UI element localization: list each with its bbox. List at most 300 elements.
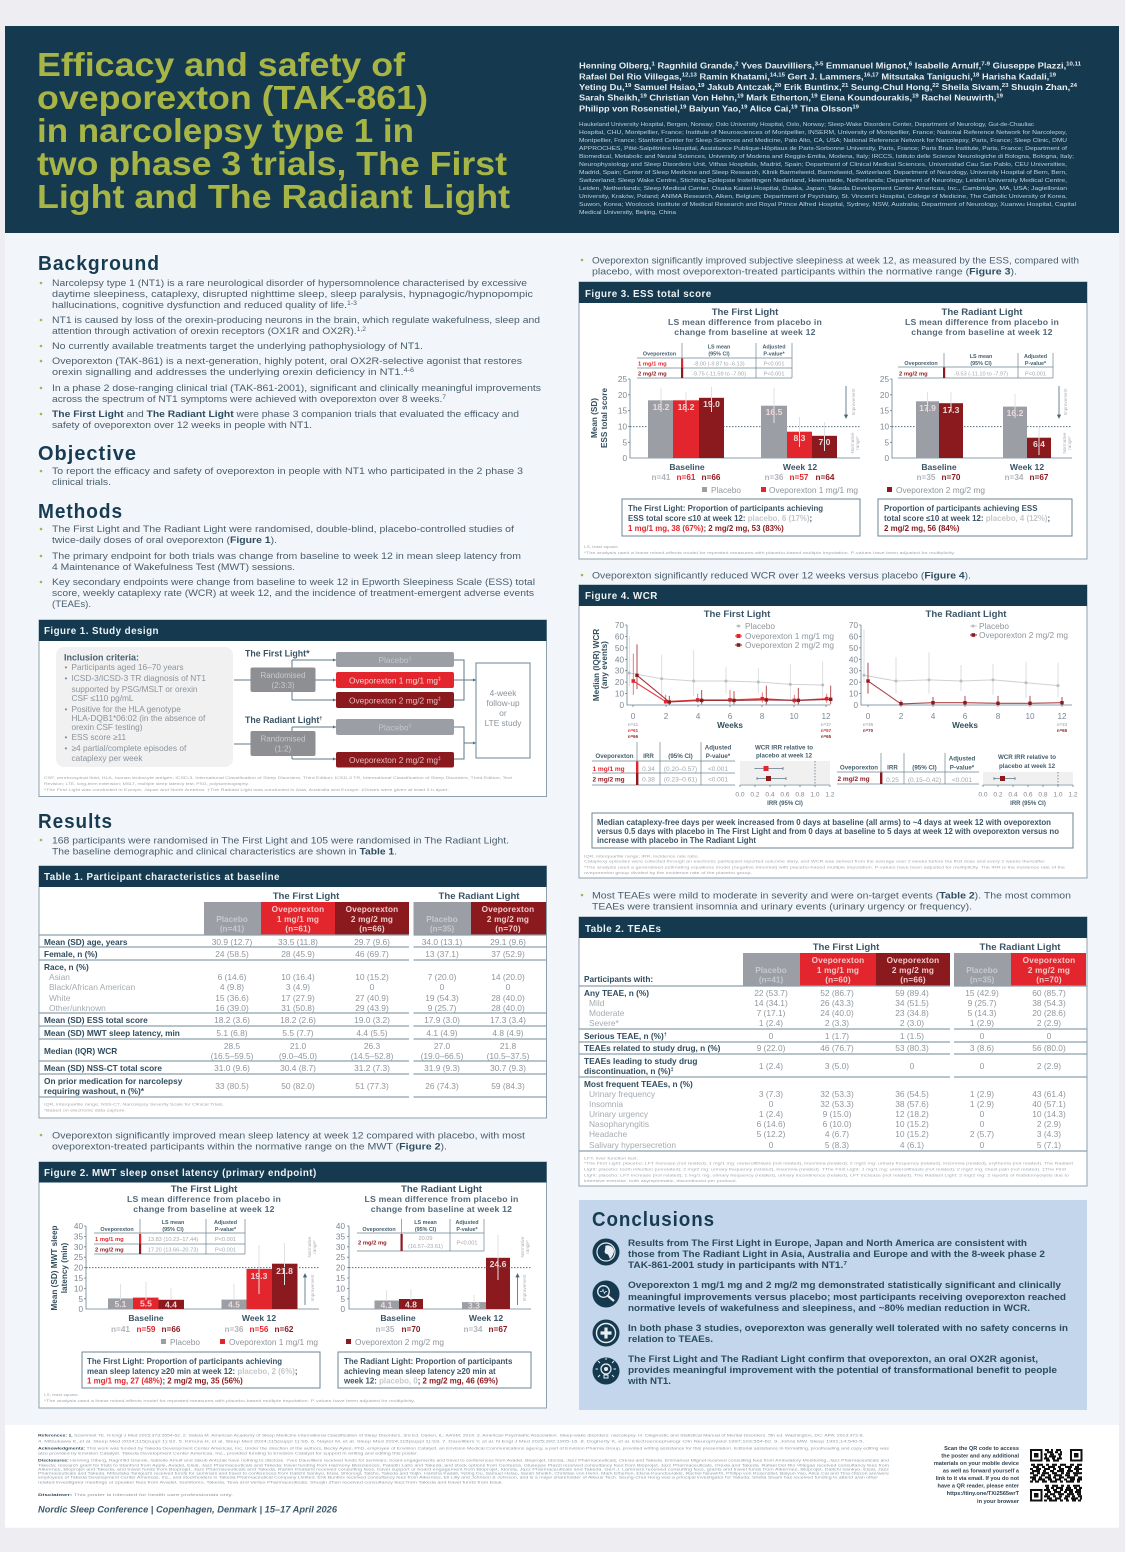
chart: first light ESS: 5 — [622, 438, 627, 448]
chart: radiant light WCR: 30 — [849, 666, 858, 676]
inclusion criteria box: Participants aged 16–70 years — [72, 662, 184, 672]
chart: first light WCR: 70 — [615, 621, 624, 630]
table 2 rows: 1 (1.5) — [900, 1031, 924, 1041]
table 1 rows: White — [49, 993, 71, 1003]
axis group labels: Week 12 — [1010, 462, 1044, 472]
text block: methods bullets: (TEAEs). — [52, 599, 91, 610]
table 2 rows: Urinary frequency — [589, 1089, 656, 1099]
authors: Yeting Du, 19 Samuel Hsiao, 19 Jakub Antczak, 20 Erik Buntinx, 21 Seung-Chul Hong, 22 Sheila Sivam, 23 Shuqin Zhan, 24 — [579, 82, 1078, 92]
heading: results: Results — [38, 811, 113, 833]
callout: cataplexy-free days: Median cataplexy-free days per week increased from 0 days at baseline (all arms) to ~4 days at week 12 with oveporexton — [597, 818, 1051, 827]
conclusion 3: In both phase 3 studies, oveporexton was generally well tolerated with no safety concerns in — [628, 1323, 1068, 1333]
forest plot first light: 0.2 — [750, 792, 760, 798]
text block: background bullets: safety of oveporexton over 12 weeks in people with NT1. — [52, 420, 312, 431]
footnotes: figure 1: Revision; LTE, long-term extension; MSLT, multiple sleep latency test; PSG, polysomnography. — [44, 781, 249, 786]
table: radiant light ESS LS mean: LS mean — [970, 354, 992, 360]
table: radiant light ESS LS mean: P<0.001 — [1025, 372, 1046, 378]
table: radiant light LS mean — [357, 1219, 484, 1251]
chart: radiant light MWT: 24.6 — [490, 1259, 507, 1269]
affiliations: Montpellier, France; Stanford Center for Sleep Sciences and Medicine, Palo Alto, CA, USA; National Reference Network for Narcolepsy, Paris, France; Sleep Clinic, DMU — [579, 138, 1067, 144]
header banner — [5, 26, 1119, 233]
inclusion criteria box: ESS score ≥11 — [72, 732, 127, 742]
table 2 column headers: (n=66) — [900, 976, 926, 984]
table 1 rows: 21.0 — [290, 1041, 306, 1051]
table: radiant light LS mean: (16.57–23.61) — [408, 1244, 443, 1250]
table: radiant light LS mean: P-value* — [456, 1227, 479, 1233]
chart: radiant light ESS: LS mean difference from placebo in — [905, 317, 1059, 327]
chart: first light WCR: n=41 — [628, 722, 639, 727]
text block: TEAE bullet — [581, 890, 1071, 912]
axis group labels: n=35 — [917, 473, 936, 482]
footnotes: figure 4: *The analysis used a generalised estimating equations model (negative binomial) with placebo-based multiple imputation. P-values have been adjusted for multiplicity. The IRR is the incidence rate of the — [584, 864, 1065, 870]
text block: background bullets: No currently available treatments target the underlying pathophysiology of NT1. — [52, 341, 423, 352]
axis group labels: Baseline — [921, 462, 957, 472]
axis group labels: Baseline — [380, 1313, 416, 1323]
text block: ESS bullet — [581, 256, 1079, 278]
conclusion 2: normative levels of wakefulness and sleepiness, and ~80% median reduction in WCR. — [628, 1303, 1030, 1313]
text block: background bullets: NT1 is caused by loss of the orexin-producing neurons in the brain, which regulate wakefulness, sleep and — [52, 315, 540, 326]
forest plot first light: placebo at week 12 — [756, 752, 813, 760]
table 1 rows: 31.9 (9.3) — [424, 1063, 460, 1073]
table and forest plot: first light IRR: Oveporexton — [595, 753, 634, 760]
chart: first light MWT: 5.1 — [115, 1299, 127, 1309]
title: two phase 3 trials, The First — [37, 145, 507, 182]
chart: radiant light MWT — [336, 1184, 531, 1334]
chart: first light MWT: 15 — [74, 1274, 83, 1283]
chart: first light WCR: 0 — [631, 712, 636, 721]
follow-up box: 4-week — [490, 688, 517, 698]
axis group labels: Baseline — [128, 1313, 164, 1323]
table 1 rows: 51 (77.3) — [355, 1081, 389, 1091]
chart: first light WCR: 50 — [615, 644, 624, 653]
table 2 rows: 24 (40.0) — [820, 1008, 854, 1018]
table 1 column headers — [204, 891, 546, 935]
affiliations: University, Kraków, Poland; ANIMA Research, Alken, Belgium; Department of Psychiatry, St. Vincent's Hospital, College of Medicine, The Catholic University of Korea, — [579, 194, 1068, 200]
forest plot first light: 1.0 — [810, 792, 820, 798]
inclusion criteria box: CSF ≤110 pg/mL — [72, 693, 134, 703]
annotation: normative range and improvement: Normative — [307, 1236, 312, 1257]
table 2 rows: 1 (2.9) — [970, 1089, 994, 1099]
chart: radiant light WCR: 20 — [849, 678, 858, 687]
table 2 rows: 20 (28.6) — [1032, 1008, 1066, 1018]
affiliations: Neurophysiology and Sleep Disorders Unit, Vithas Hospitals, Madrid, Spain; Department of Clinical Medical Sciences, Universidad Cau San Pablo, CEU Universities, — [579, 162, 1068, 168]
table 1 rows: Other/unknown — [49, 1003, 106, 1013]
table 1 rows: 4.1 (4.9) — [426, 1028, 458, 1038]
text block: background bullets — [40, 278, 541, 431]
table 2 column headers: 2 mg/2 mg — [1028, 966, 1070, 975]
annotation: improvement and normative right: Normative — [1062, 432, 1067, 453]
table: first light LS mean — [94, 1219, 245, 1254]
follow-up box: LTE study — [485, 718, 522, 728]
chart: first light MWT: 4.5 — [228, 1300, 240, 1310]
chart: first light WCR: 10 — [615, 690, 624, 698]
chart: first light MWT: change from baseline at week 12 — [133, 1204, 275, 1214]
text block: objective: clinical trials. — [52, 477, 111, 488]
table: first light LS mean: 17.20 (13.66–20.73) — [148, 1248, 198, 1254]
table 1 rows: 4.4 (5.5) — [356, 1028, 388, 1038]
table: radiant light LS mean: Oveporexton — [362, 1227, 396, 1233]
inclusion criteria box: • — [64, 662, 68, 672]
table: radiant light ESS LS mean: -9.53 (-11.10 to -7.97) — [954, 372, 1008, 378]
forest plot radiant light — [978, 754, 1078, 807]
table and forest plot: radiant light IRR — [837, 753, 1078, 807]
table and forest plot: radiant light IRR: (95% CI) — [912, 764, 937, 772]
callout: first light ESS proportion — [622, 499, 860, 536]
forest plot radiant light: placebo at week 12 — [999, 763, 1056, 770]
table 2 rows: Serious TEAE, n (%)† — [584, 1031, 667, 1041]
table 2 rows: 0 — [910, 1061, 915, 1071]
chart: first light ESS: 8.3 — [794, 433, 806, 443]
chart: first light ESS: 7.0 — [819, 437, 831, 447]
table and forest plot: radiant light IRR: <0.001 — [952, 777, 972, 784]
panel: table 2 TEAEs — [579, 917, 1087, 1186]
table 1 rows: 59 (84.3) — [491, 1081, 525, 1091]
chart: first light ESS: 15 — [618, 406, 627, 416]
table 2 column headers: (n=60) — [825, 976, 851, 984]
table and forest plot: first light IRR: 0.38 — [642, 776, 655, 784]
chart: radiant light MWT: 15 — [336, 1274, 345, 1283]
title — [37, 46, 510, 215]
conclusion 4 — [592, 1354, 1057, 1386]
heading: background: Background — [38, 253, 160, 275]
table: first light ESS LS mean: -9.75 (-11.59 to -7.90) — [692, 372, 746, 378]
chart: first light ESS: 16.5 — [766, 407, 783, 417]
section: objective — [38, 443, 523, 488]
forest plot radiant light: WCR IRR relative to — [998, 754, 1056, 761]
table 2 rows: 0 — [980, 1109, 985, 1119]
table 1 column headers: Oveporexton — [346, 905, 398, 914]
references and disclosures: also provided by Envision Catalyst. Takeda Development Center Americas, Inc., provided funding to Envision Catalyst for support in writing and editing this poster. — [38, 1450, 418, 1456]
chart: radiant light WCR: n=33 — [1057, 722, 1068, 727]
axis group labels — [652, 462, 835, 482]
callout: first light MWT proportion: 1 mg/1 mg, 27 (48%); 2 mg/2 mg, 35 (56%) — [87, 1376, 243, 1386]
chart: first light MWT: LS mean difference from placebo in — [127, 1194, 281, 1204]
QR instructions: Scan the QR code to access — [944, 1446, 1019, 1452]
table 1 rows — [44, 937, 530, 1096]
references and disclosures: employees of Takeda Development Center Americas, Inc., and stockholders in Takeda Pharmaceutical Company Limited. Erik Buntinx received consultancy fees from Alkermes, Eli Lilly and Johnson & Johnson, and is a major shareholder of Alkeus Tech. Seung-Chul Hong was a principal investigator for Takeda. Sheila Sivam has received funding to attend a/an other — [38, 1474, 879, 1480]
table 1 rows: 26.3 — [364, 1041, 380, 1051]
table 2 rows: 53 (80.3) — [895, 1043, 929, 1053]
table 1 column headers: 2 mg/2 mg — [351, 915, 393, 924]
table 1 rows: 18.2 (3.6) — [214, 1015, 250, 1025]
table and forest plot: first light IRR: P-value* — [706, 753, 731, 760]
table: first light LS mean: 1 mg/1 mg — [95, 1237, 124, 1243]
table: radiant light ESS LS mean: Adjusted — [1024, 354, 1047, 360]
table and forest plot: radiant light IRR: IRR — [887, 764, 898, 772]
icon: QR code — [1030, 1450, 1082, 1500]
table 1 rows: 7 (20.0) — [428, 972, 457, 982]
table 1 rows: 19 (54.3) — [425, 993, 459, 1003]
conclusion 1: those from The Radiant Light in Asia, Australia and Europe and with the 8-week phase 2 — [628, 1249, 1045, 1259]
text block: objective — [40, 466, 523, 488]
table 2 rows: 60 (85.7) — [1032, 988, 1066, 998]
table 1 column headers: The Radiant Light — [438, 891, 520, 902]
table 2 column headers: Placebo — [966, 966, 998, 975]
text block: background bullets: Oveporexton (TAK-861) is a next-generation, highly potent, oral OX2R-selective agonist that restores — [52, 356, 522, 367]
table 1 rows: Mean (SD) ESS total score — [44, 1015, 148, 1025]
callout: first light ESS proportion: The First Light: Proportion of participants achieving — [628, 504, 823, 513]
table 1 rows: 33.5 (11.8) — [278, 937, 318, 947]
axis group labels: Week 12 — [783, 462, 817, 472]
authors: Rafael Del Rio Villegas, 12,13 Ramin Khatami, 14,15 Gert J. Lammers, 16,17 Mitsutaka Taniguchi, 18 Harisha Kadali, 19 — [579, 72, 1056, 82]
table 2 rows: 4 (6.7) — [825, 1129, 849, 1139]
inclusion criteria box: Inclusion criteria: — [64, 652, 139, 662]
chart: radiant light ESS: 25 — [880, 375, 889, 384]
table 2 rows: 1 (1.7) — [825, 1031, 849, 1041]
forest plot radiant light: 0.0 — [978, 792, 988, 798]
inclusion criteria box: ≥4 partial/complete episodes of — [72, 743, 187, 753]
table: first light ESS LS mean: LS mean — [708, 344, 730, 350]
callout: cataplexy-free days — [592, 813, 1073, 848]
QR instructions: have a QR reader, please enter — [938, 1484, 1020, 1490]
study arms: radiant light — [245, 715, 454, 768]
table 1 rows: 0 — [370, 982, 375, 992]
chart: first light WCR: n=61 — [628, 728, 639, 733]
table and forest plot: radiant light IRR: (0.15–0.42) — [908, 777, 941, 784]
text block: methods bullets: twice-daily doses of oral oveporexton ( Figure 1 ). — [52, 535, 277, 546]
table 2 column headers — [584, 942, 1086, 986]
study arms: first light: The First Light* — [245, 648, 310, 658]
chart: radiant light WCR: The Radiant Light — [925, 609, 1007, 620]
table 2 rows: 0 — [980, 1031, 985, 1041]
annotation: improvement and normative: Improvement — [851, 388, 856, 415]
table 1 rows: 28.5 — [224, 1041, 240, 1051]
footnotes: figure 4: oveporexton group divided by the incidence rate of the placebo group. — [584, 870, 752, 875]
conclusion 1 — [592, 1238, 1045, 1270]
icon: magnifier — [592, 1280, 620, 1308]
text block: MWT result bullet: Oveporexton significantly improved mean sleep latency at week 12 compared with placebo, with most — [52, 1130, 525, 1142]
references and disclosures: related investigator meetings or speaker fees from Avadel, Sumitomo, Takeda, Teva and Vertex Pharmaceuticals. Shuqin Zhan received consultancy fees from Takeda and travel funds from Eisai. — [38, 1480, 503, 1484]
table and forest plot: radiant light IRR: Adjusted — [949, 756, 975, 762]
chart: first light WCR: Median (IQR) WCR — [592, 629, 601, 701]
text block: methods bullets: The primary endpoint for both trials was change from baseline to week 12 in mean sleep latency from — [52, 551, 521, 562]
forest plot first light: 1.2 — [825, 792, 835, 798]
table 2 rows: 0 — [769, 1140, 774, 1150]
chart: first light WCR: n=57 — [821, 728, 832, 733]
table 2 rows: 3 (4.3) — [1037, 1129, 1061, 1139]
chart: first light MWT: 5 — [78, 1295, 83, 1304]
table: first light LS mean: P<0.001 — [215, 1237, 236, 1243]
table 1 rows: 17.3 (3.4) — [490, 1015, 526, 1025]
chart: first light WCR: 40 — [615, 656, 624, 664]
chart: radiant light MWT: 10 — [336, 1284, 345, 1293]
table: first light LS mean: (95% CI) — [162, 1227, 184, 1233]
table 2 column headers: The First Light — [813, 942, 880, 953]
table 1 rows: 34.0 (13.1) — [422, 937, 462, 947]
chart: first light ESS: 10 — [618, 422, 627, 432]
table 1 rows: 30.4 (8.7) — [280, 1063, 316, 1073]
table 1 rows: 30.9 (12.7) — [212, 937, 252, 947]
callout: radiant light ESS proportion: 2 mg/2 mg, 56 (84%) — [884, 524, 960, 533]
series: placebo right — [862, 630, 1060, 698]
table 2 column headers: (n=41) — [759, 976, 783, 984]
footnotes: table 1: *Based on electronic data capture. — [44, 1108, 126, 1112]
forest plot first light: WCR IRR relative to — [755, 744, 813, 752]
annotation: improvement and normative right: Improvement — [1063, 388, 1068, 415]
footnotes: table 2: Light: placebo: tooth infection (unrelated); 2 mg/2 mg: urinary frequency (related), insomnia (related). †The First Light: 1 mg/1 mg: ureterolithiasis (not related); 2 mg/2 mg: chest pain (not related). ‡The First — [584, 1166, 1067, 1172]
title: Efficacy and safety of — [37, 46, 406, 83]
table 1 rows: (9.0–45.0) — [279, 1051, 317, 1061]
chart: radiant light WCR: 12 — [1057, 712, 1067, 721]
table 1 rows: 17 (27.9) — [281, 993, 315, 1003]
chart: first light WCR: 30 — [615, 666, 624, 676]
chart: radiant light ESS: 20 — [880, 391, 889, 400]
table 2 rows: Moderate — [589, 1008, 625, 1018]
chart: first light ESS: LS mean difference from placebo in — [668, 317, 822, 327]
QR instructions: as well as forward yourself a — [943, 1468, 1020, 1474]
forest plot radiant light: 1.2 — [1068, 792, 1078, 798]
chart: radiant light WCR: 4 — [931, 712, 936, 721]
chart: radiant light MWT: 40 — [336, 1222, 345, 1231]
table: radiant light ESS LS mean: Oveporexton — [904, 361, 938, 367]
footnotes: table 2: LFT, liver function test. — [584, 1156, 638, 1160]
legend: figure 2: Oveporexton 1 mg/1 mg — [229, 1337, 318, 1347]
table 1 rows: 17.9 (3.0) — [424, 1015, 460, 1025]
chart: first light MWT: 21.8 — [276, 1266, 293, 1276]
table: first light LS mean: 13.83 (10.23–17.44) — [148, 1237, 198, 1243]
study arms: radiant light: The Radiant Light† — [245, 715, 322, 725]
forest plot radiant light: 0.6 — [1023, 792, 1033, 798]
chart: first light WCR: 12 — [821, 712, 831, 721]
table: radiant light ESS LS mean: (95% CI) — [970, 361, 992, 367]
table 2 rows: 38 (54.3) — [1032, 998, 1066, 1008]
table 1 rows: 4 (9.8) — [220, 982, 244, 992]
table 1 rows: Asian — [49, 972, 70, 982]
table 2 rows: 32 (53.3) — [820, 1099, 854, 1109]
chart: radiant light ESS: change from baseline at week 12 — [911, 327, 1053, 337]
table 2 rows: Most frequent TEAEs, n (%) — [584, 1079, 693, 1089]
table: first light ESS LS mean — [637, 343, 792, 378]
table 2 rows: 0 — [980, 1140, 985, 1150]
callout: first light MWT proportion: mean sleep latency ≥20 min at week 12: placebo, 2 (6%); — [87, 1367, 297, 1376]
inclusion criteria box: • — [64, 732, 68, 742]
forest plot first light: 0.6 — [780, 792, 790, 798]
table 1 rows: 19.0 (3.2) — [354, 1015, 390, 1025]
references and disclosures: Disclaimer: This poster is intended for health care professionals only. — [38, 1492, 233, 1497]
table 2 rows: 1 (2.4) — [759, 1109, 783, 1119]
callout: radiant light ESS proportion: Proportion of participants achieving ESS — [884, 504, 1037, 513]
title: Light and The Radiant Light — [37, 178, 510, 215]
axis group labels: n=36 — [765, 473, 784, 482]
chart: radiant light MWT: 4.1 — [381, 1300, 393, 1310]
table 1 rows: 30.7 (9.3) — [490, 1063, 526, 1073]
inclusion criteria box: HLA-DQB1*06:02 (in the absence of — [72, 713, 206, 723]
annotation: improvement and normative — [844, 386, 860, 453]
text block: background bullets: In a phase 2 dose-ranging clinical trial (TAK-861-2001), significant and clinically meaningful improvements — [52, 383, 541, 394]
chart: radiant light ESS: 16.2 — [1007, 408, 1024, 418]
table 2 column headers: (n=35) — [970, 976, 994, 984]
table 1 column headers: (n=41) — [220, 924, 244, 934]
chart: radiant light ESS: 17.9 — [919, 403, 936, 413]
axis group labels: n=64 — [816, 473, 835, 482]
table 1 rows: 14 (20.0) — [491, 972, 525, 982]
chart: radiant light WCR: n=35 — [863, 722, 874, 727]
table 1 rows: 5.5 (7.7) — [282, 1028, 314, 1038]
chart: radiant light ESS: The Radiant Light — [941, 307, 1023, 318]
legend: radiant light WCR — [970, 621, 1068, 640]
study arms: first light: Oveporexton 1 mg/1 mg‡ — [349, 676, 441, 686]
inclusion criteria box: supported by PSG/MSLT or orexin — [72, 684, 198, 694]
chart: first light MWT: Mean (SD) MWT sleep — [50, 1225, 59, 1311]
table 1 rows: 0 — [440, 982, 445, 992]
chart: first light ESS: change from baseline at week 12 — [674, 327, 816, 337]
callout: radiant light MWT proportion: achieving mean sleep latency ≥20 min at — [344, 1367, 496, 1376]
table 1 column headers: Placebo — [426, 915, 458, 924]
table and forest plot: first light IRR: 0.34 — [642, 766, 655, 773]
chart: first light WCR: n=65 — [821, 734, 832, 739]
table 1 rows: 31 (50.8) — [281, 1003, 315, 1013]
icon: medical cross — [592, 1320, 620, 1346]
inclusion criteria box: • — [64, 704, 68, 714]
table 1 rows: 9 (25.7) — [428, 1003, 457, 1013]
forest plot first light: 0.0 — [735, 792, 745, 798]
chart: first light MWT: The First Light — [171, 1184, 238, 1195]
table 1 rows: 28 (45.9) — [281, 949, 315, 959]
series: oveporexton 1 mg — [632, 654, 828, 704]
references and disclosures: References: 1. Scammell TE. N Engl J Med 2015;373:2654-62. 2. Sateia M. American Academy of Sleep Medicine International Classification of Sleep Disorders, 3rd Ed. Darien, IL: AASM; 2014. 3. American Psychiatric Association. Sleep-wake disorders: narcolepsy. In: Diagnostic and Statistical Manual of Mental Disorders. 5th ed. Washington, DC: APA; 2013:372-8. — [38, 1432, 864, 1438]
table and forest plot: first light IRR — [592, 742, 835, 807]
chart: radiant light MWT: The Radiant Light — [401, 1184, 483, 1195]
chart: first light ESS: 25 — [618, 375, 627, 384]
inclusion criteria box — [56, 647, 233, 767]
text block: ESS bullet: Oveporexton significantly improved subjective sleepiness at week 12, as measured by the ESS, compared with — [592, 256, 1079, 266]
chart: radiant light MWT: 20 — [336, 1264, 345, 1273]
heading: figure 1: Figure 1. Study design — [44, 626, 159, 637]
legend: figure 3: Oveporexton 2 mg/2 mg — [896, 485, 985, 495]
legend: figure 3: Oveporexton 1 mg/1 mg — [769, 485, 858, 495]
table 1 rows: 10 (16.4) — [281, 972, 315, 982]
legend: figure 3: Placebo — [711, 485, 741, 495]
chart: radiant light ESS: 15 — [880, 406, 889, 416]
series: oveporexton 2 mg — [635, 644, 832, 705]
table 1 rows: requiring washout, n (%)* — [44, 1086, 145, 1096]
study arms: radiant light: Placebo‡ — [379, 722, 411, 732]
table 1 rows: 33 (80.5) — [215, 1081, 249, 1091]
study arms: first light: (2:3:3) — [271, 681, 295, 690]
forest plot first light: 0.4 — [765, 792, 775, 798]
table 2 rows: 1 (2.9) — [970, 1018, 994, 1028]
axis group labels: n=70 — [942, 473, 961, 482]
text block: background bullets: hallucinations, cognitive dysfunction and reduced quality of life. 1-3 — [52, 300, 358, 311]
legend: first light WCR: Oveporexton 2 mg/2 mg — [745, 640, 834, 650]
table and forest plot: first light IRR: Adjusted — [705, 744, 731, 752]
axis group labels: Week 12 — [469, 1313, 503, 1323]
table 2 column headers: Participants with: — [584, 974, 653, 984]
table 2 column headers: Placebo — [755, 966, 787, 975]
forest plot radiant light: IRR (95% CI) — [1010, 801, 1046, 807]
chart: first light WCR: 6 — [728, 712, 733, 721]
text block: background bullets: The First Light and The Radiant Light were phase 3 companion trials that evaluated the efficacy and — [52, 409, 519, 420]
chart: radiant light WCR: 40 — [849, 656, 858, 664]
table: first light LS mean: Adjusted — [214, 1220, 237, 1226]
table: first light ESS LS mean: P<0.001 — [764, 372, 784, 378]
text block: MWT result bullet — [40, 1130, 525, 1152]
table 1 rows: 28 (40.0) — [491, 1003, 525, 1013]
affiliations: Haukeland University Hospital, Bergen, Norway; Oslo University Hospital, Oslo, Norway; Sleep-Wake Disorders Center, Department of Neurology, Gui-de-Chauliac — [579, 122, 1034, 128]
chart: first light ESS: 18.2 — [653, 402, 670, 412]
chart: radiant light ESS: 6.4 — [1033, 439, 1045, 449]
axis group labels: n=59 — [137, 1325, 156, 1334]
footnotes: figure 1: CSF, cerebrospinal fluid; HLA, human leukocyte antigen; ICSD-3, International Classification of Sleep Disorders, Third Edition; ICSD-3 TR, International Classification of Sleep Disorders, Third Edition, Text — [44, 775, 513, 780]
text block: methods bullets: 4 Maintenance of Wakefulness Test (MWT) sessions. — [52, 562, 295, 573]
callout: radiant light MWT proportion: The Radiant Light: Proportion of participants — [344, 1357, 513, 1366]
table 2 rows: 2 (3.3) — [825, 1018, 849, 1028]
conclusion 2 — [592, 1280, 1066, 1313]
table and forest plot: radiant light IRR: P-value* — [950, 764, 975, 772]
table 2 rows: 14 (34.1) — [754, 998, 788, 1008]
chart: radiant light WCR: 0 — [866, 712, 871, 721]
chart: first light ESS: 20 — [618, 391, 627, 400]
